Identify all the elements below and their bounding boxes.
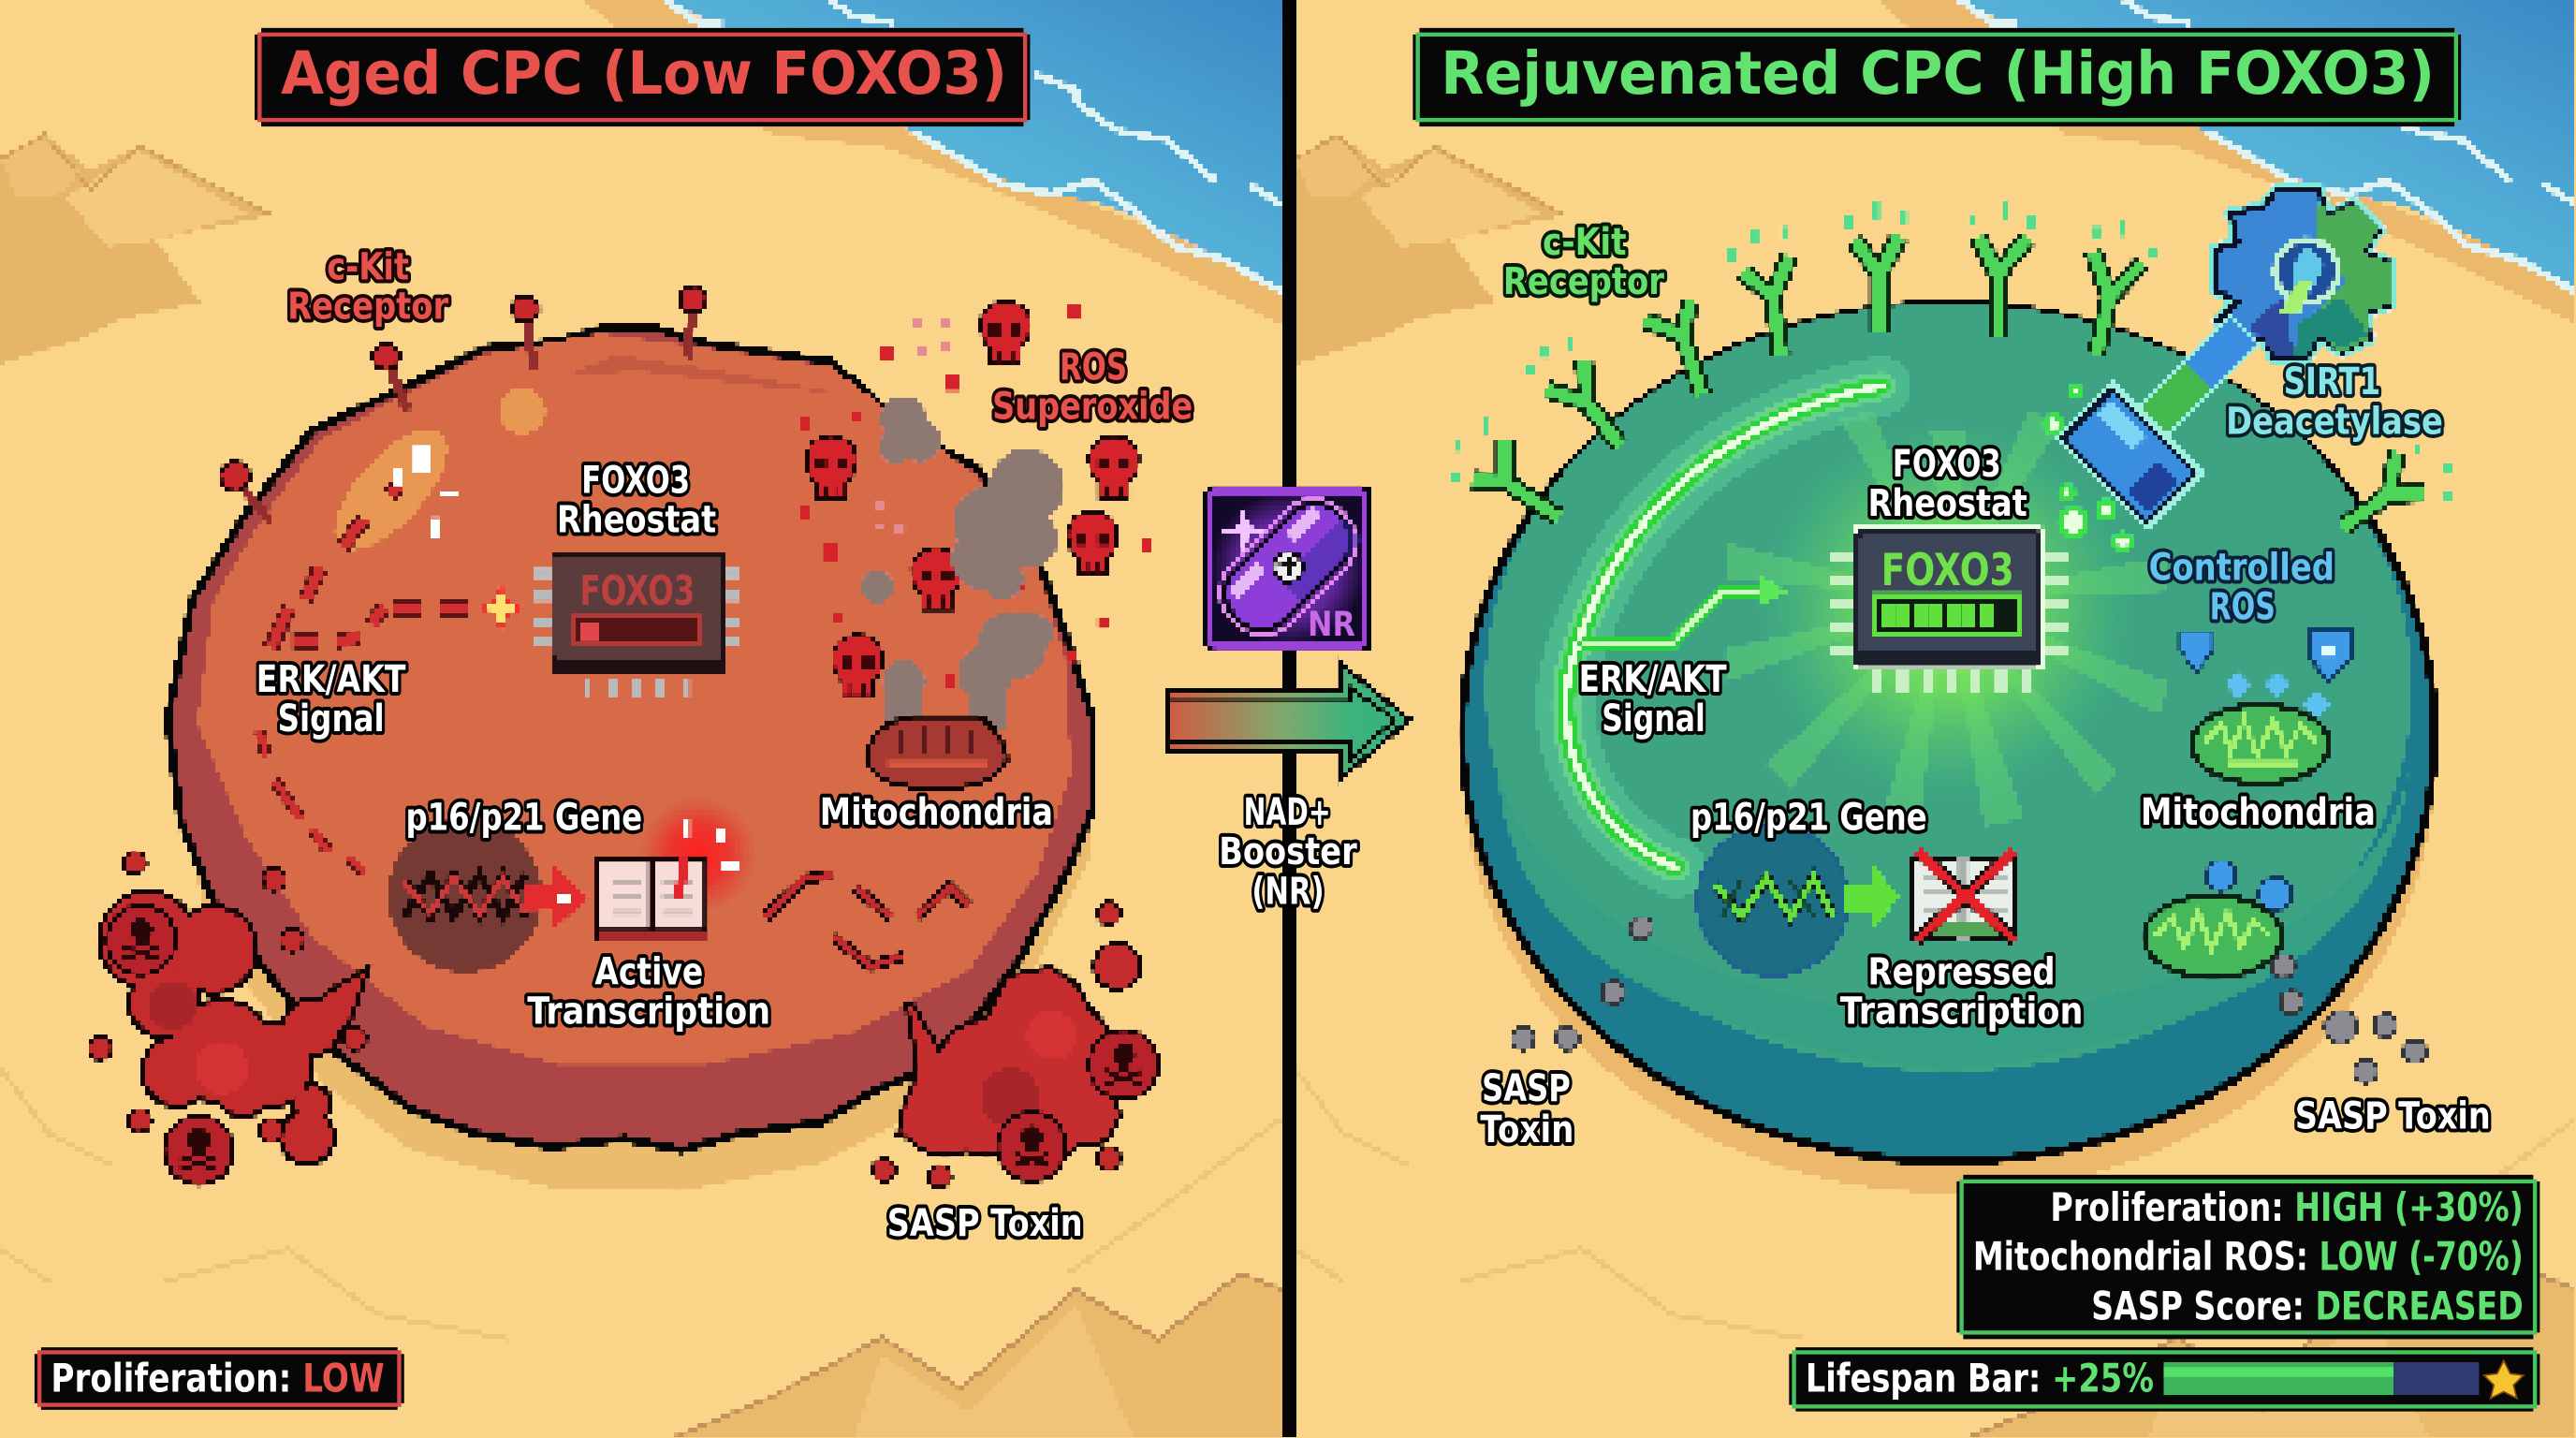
c-Kit receptors healthy (1472, 237, 2425, 527)
FOXO3 chip dim (534, 550, 739, 697)
label: SIRT1 deacetylase: Deacetylase (2226, 399, 2443, 443)
smoke clouds (861, 396, 1064, 735)
panel: aged beach background (0, 0, 1283, 1438)
label: SASP toxin right rejuvenated: SASP Toxin (2295, 1094, 2491, 1138)
arc halo (1566, 386, 1881, 868)
label: active transcription: Transcription (527, 989, 770, 1033)
label: ERK/AKT rejuvenated (1579, 657, 1727, 741)
damaged mitochondria (866, 716, 1007, 788)
label: SASP toxin left rejuvenated: SASP (1482, 1066, 1571, 1110)
red glow (639, 795, 757, 914)
panel: rejuvenated beach background (1295, 0, 2576, 1438)
label: c-Kit receptor aged (287, 244, 448, 328)
ROS shields (2180, 629, 2351, 720)
green particles (2045, 386, 2130, 550)
title: aged CPC: Aged CPC (Low FOXO3) (281, 38, 1007, 108)
title: aged CPC (255, 28, 1030, 126)
ERK/AKT signal arc (1566, 386, 1881, 868)
label: FOXO3 rheostat aged: FOXO3 (581, 459, 690, 503)
chip text aged: FOXO3 (580, 567, 695, 615)
label: SASP toxin aged: SASP Toxin (887, 1201, 1083, 1245)
label: active transcription (527, 949, 770, 1033)
title: rejuvenated CPC: Rejuvenated CPC (High FOXO3) (1441, 38, 2435, 108)
label: ROS superoxide: ROS (1060, 345, 1127, 389)
label: mitochondria rejuvenated: Mitochondria (2141, 790, 2376, 834)
stats panel (1956, 1175, 2539, 1339)
lifespan bar (1789, 1347, 2539, 1412)
active book (598, 818, 739, 942)
panel: aged CPC cell (89, 286, 1158, 1191)
SIRT1 hammer (2054, 316, 2259, 531)
stats panel: Proliferation: HIGH (+30%) (2050, 1184, 2524, 1230)
label: SASP toxin left rejuvenated: Toxin (1480, 1108, 1573, 1152)
label: c-Kit receptor aged: c-Kit (327, 244, 409, 288)
chip rays (1725, 411, 2169, 827)
label: repressed transcription (1840, 949, 2083, 1033)
label: ERK/AKT aged: ERK/AKT (256, 657, 406, 701)
repressed book with cross (1910, 851, 2016, 940)
label: ERK/AKT aged: Signal (278, 697, 385, 741)
highlight patches (316, 412, 466, 568)
cell body inner (1486, 302, 2411, 1071)
signal arrow head (1758, 575, 1788, 608)
label: controlled ROS: ROS (2210, 585, 2276, 629)
SASP toxin particles (1512, 917, 2426, 1083)
title: rejuvenated CPC (1412, 28, 2461, 126)
cell shadow (1462, 339, 2435, 1193)
ERK/AKT broken signal (259, 485, 468, 874)
label: ROS superoxide: Superoxide (992, 385, 1193, 429)
mRNA fragments (766, 874, 970, 966)
label: c-Kit receptor rejuvenated (1503, 220, 1664, 303)
c-Kit receptors withered (220, 286, 707, 522)
label: FOXO3 rheostat rejuvenated: Rheostat (1868, 481, 2027, 525)
label: FOXO3 rheostat rejuvenated: FOXO3 (1893, 442, 2001, 486)
label: SIRT1 deacetylase (2226, 360, 2443, 443)
p16/p21 nucleus and DNA (389, 820, 540, 971)
healthy mitochondria lower (2144, 861, 2291, 977)
label: NAD+ booster (1219, 790, 1357, 913)
label: ERK/AKT rejuvenated: ERK/AKT (1579, 657, 1727, 701)
p16/p21 nucleus repressed (1697, 825, 1848, 976)
icon: NR pill booster (1204, 483, 1372, 653)
label: repressed transcription: Repressed (1868, 949, 2056, 993)
label: p16/p21 gene aged: p16/p21 Gene (406, 795, 642, 839)
label: p16/p21 gene rejuvenated: p16/p21 Gene (1690, 795, 1927, 839)
label: SASP toxin left rejuvenated (1480, 1066, 1573, 1152)
SASP toxin left cluster (89, 851, 366, 1184)
label: FOXO3 rheostat rejuvenated (1868, 442, 2027, 525)
label: c-Kit receptor aged: Receptor (287, 284, 448, 328)
label: controlled ROS: Controlled (2149, 546, 2334, 590)
label: active transcription: Active (594, 949, 703, 993)
status: proliferation low: Proliferation: LOW (51, 1356, 385, 1401)
stats panel: Mitochondrial ROS: LOW (-70%) (1973, 1234, 2524, 1280)
green arrow to book (1843, 864, 1899, 930)
divider (1281, 0, 1295, 1438)
healthy mitochondria upper (2191, 705, 2330, 784)
receptor sparks (1449, 200, 2454, 500)
cell body outer (1462, 304, 2435, 1162)
label: NAD+ booster: NAD+ (1244, 790, 1331, 834)
label: c-Kit receptor rejuvenated: c-Kit (1543, 220, 1627, 264)
ROS skulls (798, 301, 1151, 697)
panel: rejuvenated CPC cell (1449, 191, 2454, 1193)
label: repressed transcription: Transcription (1840, 989, 2083, 1033)
FOXO3 chip active (1832, 526, 2067, 692)
red arrow to book (526, 864, 588, 930)
label: NAD+ booster: (NR) (1251, 869, 1325, 913)
stats panel: SASP Score: DECREASED (2091, 1283, 2524, 1328)
lifespan bar: Lifespan Bar: +25% (1806, 1356, 2154, 1401)
label: ROS superoxide (992, 345, 1193, 429)
label: NAD+ booster: Booster (1219, 829, 1357, 873)
SASP toxin right cluster (872, 902, 1158, 1188)
cell shadow (168, 370, 1092, 1191)
cell body inner (198, 333, 1071, 1064)
label: FOXO3 rheostat aged: Rheostat (557, 498, 716, 542)
cell body outer (168, 329, 1092, 1151)
SIRT1 gear (2215, 191, 2391, 359)
label: c-Kit receptor rejuvenated: Receptor (1503, 259, 1664, 303)
spark (479, 585, 522, 631)
label: FOXO3 rheostat aged (557, 459, 716, 542)
label: controlled ROS (2149, 546, 2334, 629)
chip text rejuvenated: FOXO3 (1881, 545, 2014, 596)
label: ERK/AKT aged (256, 657, 406, 741)
arrow: aged to rejuvenated (1166, 662, 1410, 781)
label: ERK/AKT rejuvenated: Signal (1602, 697, 1705, 741)
label: mitochondria aged: Mitochondria (820, 790, 1053, 834)
label: NR on pill: NR (1308, 604, 1355, 644)
label: SIRT1 deacetylase: SIRT1 (2284, 360, 2380, 404)
